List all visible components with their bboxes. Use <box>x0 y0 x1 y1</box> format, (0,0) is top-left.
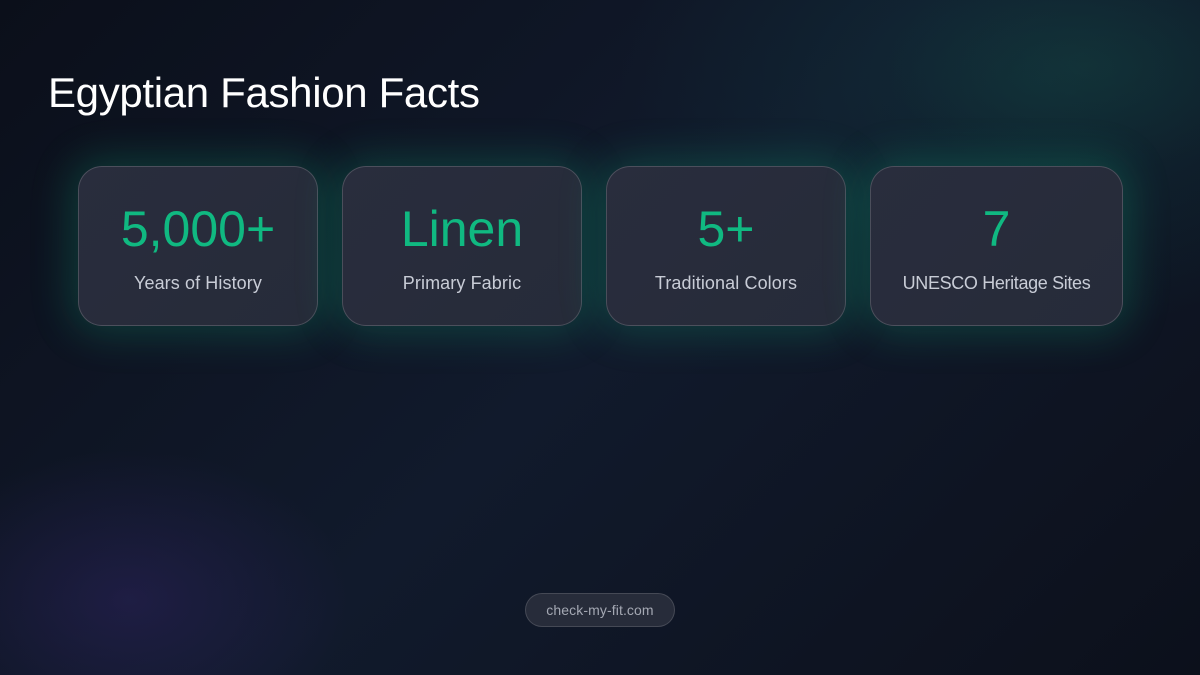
panel: years of history <box>78 166 318 326</box>
panel: unesco heritage sites <box>870 166 1123 326</box>
stat value: linen: Linen <box>401 201 523 257</box>
stat value: 7: 7 <box>983 201 1010 257</box>
stat value: 5,000+: 5,000+ <box>121 201 275 257</box>
stat label: unesco heritage sites: UNESCO Heritage Sites <box>903 273 1090 293</box>
stat label: primary fabric: Primary Fabric <box>403 273 521 293</box>
stat value: 5+: 5+ <box>697 201 754 257</box>
title: Egyptian Fashion Facts <box>48 69 480 116</box>
stat label: years of history: Years of History <box>134 273 262 293</box>
stat label: traditional colors: Traditional Colors <box>655 273 797 293</box>
footer pill: website: check-my-fit.com <box>546 602 654 618</box>
panel: traditional colors <box>606 166 846 326</box>
panel: primary fabric <box>342 166 582 326</box>
footer pill: website <box>525 593 675 627</box>
